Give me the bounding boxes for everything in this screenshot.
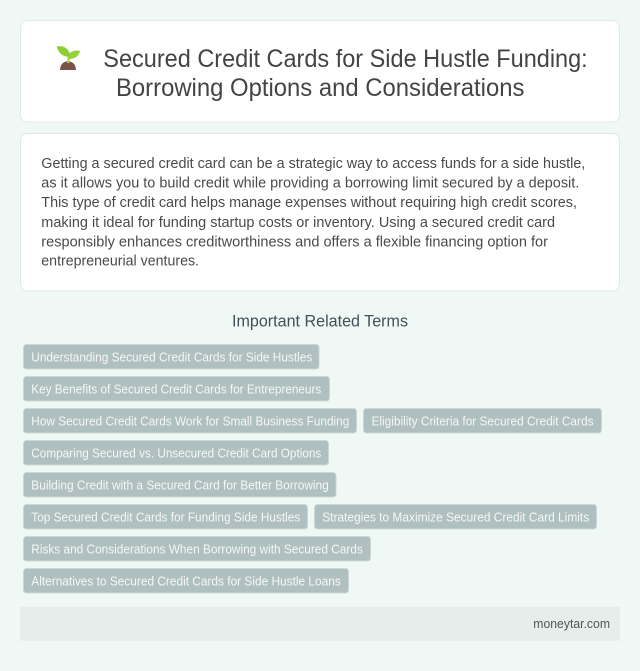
tag: How Secured Credit Cards Work for Small Business Funding bbox=[31, 413, 349, 428]
tag bbox=[24, 376, 330, 401]
tag bbox=[24, 472, 336, 497]
tag bbox=[314, 504, 596, 529]
tag bbox=[24, 440, 328, 465]
tag: Risks and Considerations When Borrowing with Secured Cards bbox=[31, 541, 363, 556]
text block: summary paragraph: This type of credit card helps manage expenses without requiring high credit scores, bbox=[41, 194, 577, 211]
tag bbox=[24, 568, 348, 593]
tag bbox=[24, 344, 319, 369]
footer source text: moneytar.com bbox=[533, 617, 610, 631]
title: Secured Credit Cards for Side Hustle Funding: bbox=[103, 45, 588, 73]
footer band bbox=[20, 607, 620, 641]
tag: Strategies to Maximize Secured Credit Card Limits bbox=[322, 509, 589, 524]
icon: sprout bbox=[57, 46, 80, 70]
tag bbox=[24, 504, 308, 529]
tag: Comparing Secured vs. Unsecured Credit Card Options bbox=[31, 445, 321, 460]
tag: Alternatives to Secured Credit Cards for Side Hustle Loans bbox=[31, 573, 341, 588]
tag: Understanding Secured Credit Cards for Side Hustles bbox=[31, 349, 312, 364]
heading: important related terms: Important Related Terms bbox=[232, 313, 408, 331]
text block: summary paragraph bbox=[41, 155, 585, 270]
title bbox=[103, 45, 588, 102]
tag: Eligibility Criteria for Secured Credit Cards bbox=[372, 413, 594, 428]
tag bbox=[364, 408, 602, 433]
tag list bbox=[24, 344, 602, 593]
text block: summary paragraph: entrepreneurial ventures. bbox=[41, 253, 199, 270]
panel: header card bbox=[20, 20, 620, 122]
text block: summary paragraph: as it allows you to build credit while providing a borrowing limit secured by a deposit. bbox=[41, 175, 579, 192]
tag bbox=[24, 536, 370, 561]
tag: Top Secured Credit Cards for Funding Side Hustles bbox=[31, 509, 300, 524]
text block: summary paragraph: responsibly enhances creditworthiness and offers a flexible financing option for bbox=[41, 233, 548, 250]
text block: summary paragraph: Getting a secured credit card can be a strategic way to access funds for a side hustle, bbox=[41, 155, 585, 172]
tag bbox=[24, 408, 356, 433]
panel: summary card bbox=[20, 134, 620, 291]
text block: summary paragraph: making it ideal for funding startup costs or inventory. Using a secured credit card bbox=[41, 214, 555, 231]
tag: Building Credit with a Secured Card for Better Borrowing bbox=[31, 477, 329, 492]
title: Borrowing Options and Considerations bbox=[116, 74, 524, 102]
tag: Key Benefits of Secured Credit Cards for Entrepreneurs bbox=[31, 381, 321, 396]
